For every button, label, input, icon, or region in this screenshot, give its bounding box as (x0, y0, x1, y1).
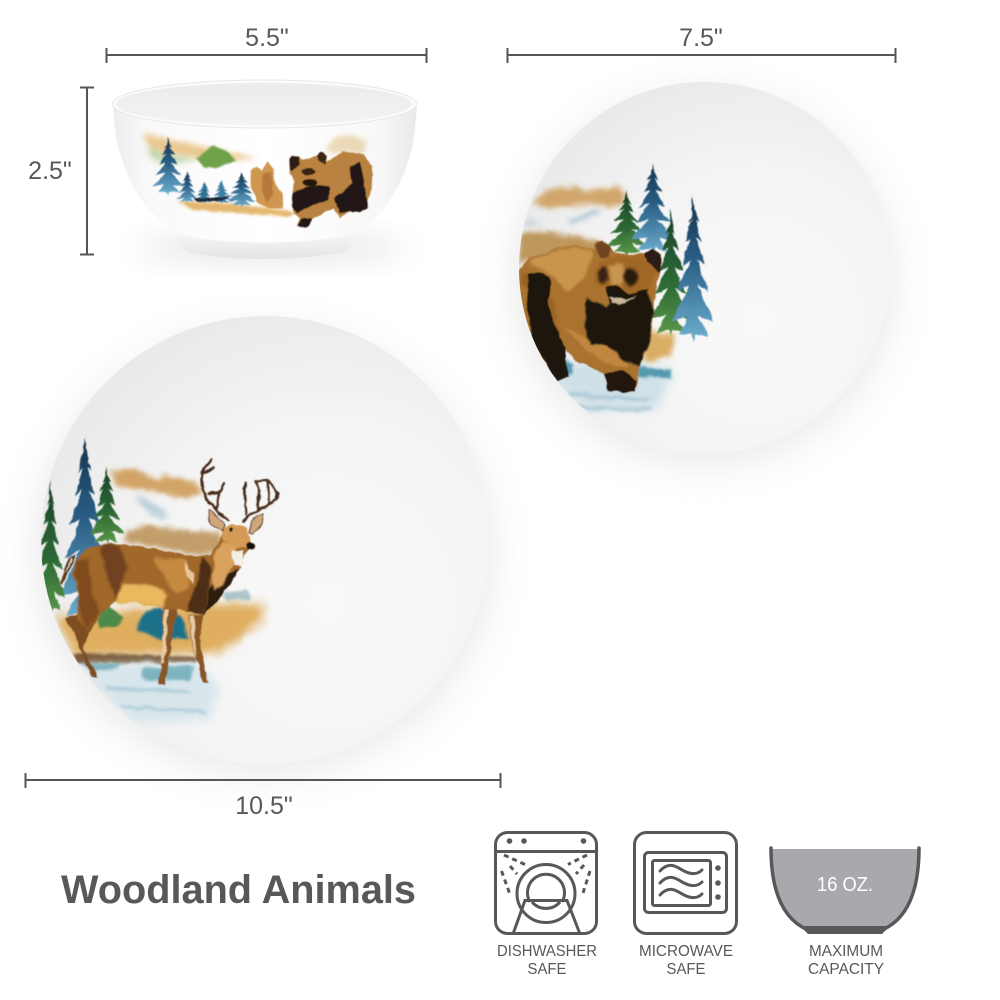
plate dimension: width 7.5 inches: 7.5" (679, 24, 723, 52)
plate disc (41, 316, 489, 764)
bear body (517, 240, 661, 393)
label: dishwasher safe: SAFE (528, 961, 566, 978)
title: Woodland Animals (61, 868, 416, 912)
label: microwave safe: MICROWAVE (639, 943, 733, 960)
autumn trees (251, 162, 283, 208)
plate disc (519, 82, 891, 454)
deer head and ears (222, 523, 255, 550)
cereal bowl (112, 80, 417, 262)
icon: dishwasher safe (496, 832, 596, 934)
plate shadow (514, 92, 894, 464)
large plate dimension: width 10.5 inches (26, 773, 500, 820)
icon: bowl capacity: 16 OZ. (817, 874, 873, 896)
distant hills (110, 467, 203, 498)
icon: bowl capacity (771, 848, 919, 934)
teal bush (137, 607, 190, 638)
deer chest and neck (213, 542, 237, 590)
label: maximum capacity: MAXIMUM (809, 943, 883, 960)
ground (55, 603, 263, 657)
label: dishwasher safe: DISHWASHER (497, 943, 597, 960)
pine trees (606, 192, 647, 255)
label: dishwasher safe (497, 943, 597, 978)
distant hills (533, 186, 627, 208)
bowl dimension: width 5.5 inches: 5.5" (245, 24, 289, 52)
green tree (197, 146, 236, 168)
deer tail (62, 556, 75, 583)
plate shadow (36, 330, 492, 774)
bear scene artwork (517, 164, 714, 412)
deer antlers (201, 459, 278, 522)
bowl dimension: height 2.5 inches: 2.5" (28, 157, 72, 185)
water (83, 663, 220, 723)
deer scene artwork (34, 436, 278, 723)
deer body (73, 530, 252, 630)
large plate dimension: width 10.5 inches: 10.5" (235, 792, 293, 820)
bowl shadow (135, 234, 405, 262)
deer legs (158, 607, 177, 685)
bear dark fur (527, 272, 568, 382)
watercolor backdrop (143, 133, 257, 162)
label: maximum capacity: CAPACITY (808, 961, 884, 978)
bowl body (113, 104, 417, 259)
bowl dimension: width 5.5 inches (106, 24, 426, 63)
pine trees (58, 438, 101, 618)
bowl rim (112, 80, 416, 128)
bear (289, 151, 373, 227)
bowl dimension: height 2.5 inches (28, 88, 94, 254)
ground and water (643, 330, 677, 363)
label: maximum capacity (808, 943, 884, 978)
bowl interior (116, 83, 412, 125)
blue pines (152, 137, 184, 195)
small bear plate (514, 82, 894, 464)
large deer plate (34, 316, 492, 774)
bowl foot shading (175, 232, 357, 259)
label: microwave safe: SAFE (666, 961, 706, 978)
plate dimension: width 7.5 inches (508, 24, 896, 63)
icon: microwave safe (634, 832, 736, 934)
bear face (621, 268, 639, 285)
label: microwave safe (639, 943, 733, 978)
bowl artwork (143, 133, 373, 227)
